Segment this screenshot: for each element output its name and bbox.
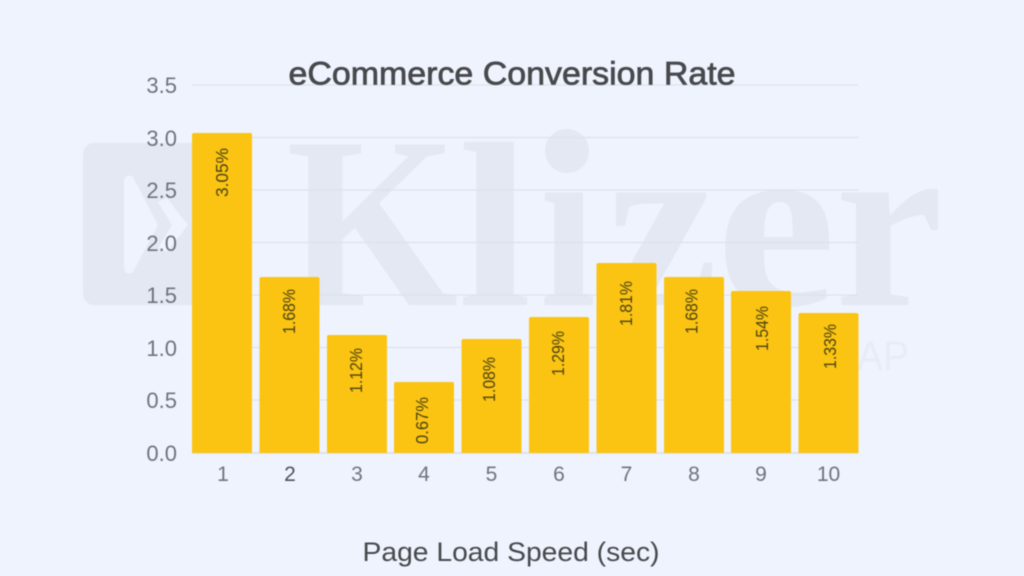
bar: 6 seconds, 1.29% [529, 317, 589, 453]
x axis labels: 3 [351, 463, 363, 486]
watermark wordmark: z [606, 87, 718, 358]
bar: 8 seconds, 1.68%: 1.68% [682, 289, 702, 334]
bar: 4 seconds, 0.67% [394, 382, 454, 453]
bar: 9 seconds, 1.54% [731, 291, 791, 453]
bar: 3 seconds, 1.12%: 1.12% [346, 348, 366, 393]
watermark i dot [545, 129, 589, 173]
bar: 1 second, 3.05%: 3.05% [212, 148, 232, 197]
x axis labels: 10 [817, 463, 840, 486]
watermark wordmark [286, 87, 943, 358]
x axis labels: 8 [688, 463, 700, 486]
y axis labels: 3.0 [146, 126, 177, 151]
title: eCommerce Conversion Rate [288, 56, 736, 92]
watermark icon [83, 143, 213, 305]
x axis labels: 6 [553, 463, 565, 486]
bar: 9 seconds, 1.54%: 1.54% [752, 306, 772, 351]
y axis labels: 1.0 [146, 336, 177, 361]
bar: 5 seconds, 1.08% [462, 339, 522, 453]
bar: 6 seconds, 1.29%: 1.29% [548, 331, 568, 376]
watermark wordmark: e [716, 87, 836, 358]
x axis labels: 1 [217, 463, 229, 486]
y axis labels: 0.5 [146, 388, 177, 413]
bar: 7 seconds, 1.81%: 1.81% [616, 281, 636, 326]
bar: 2 seconds, 1.68%: 1.68% [279, 289, 299, 334]
x axis labels [217, 463, 840, 486]
bar: 8 seconds, 1.68% [664, 277, 724, 453]
watermark: Klizer logo [83, 87, 943, 379]
x axis labels: 7 [621, 463, 632, 486]
y axis labels: 0.0 [146, 441, 177, 466]
watermark wordmark: l [458, 96, 532, 357]
bar: 1 second, 3.05% [192, 133, 252, 453]
watermark small text: AP [857, 332, 909, 379]
watermark wordmark: K [286, 87, 458, 358]
y axis labels: 2.5 [146, 178, 177, 203]
bar: 7 seconds, 1.81% [596, 263, 656, 453]
bar chart [192, 133, 858, 453]
x axis labels: 2 [284, 463, 296, 486]
bar: 4 seconds, 0.67%: 0.67% [412, 397, 432, 444]
bar: 10 seconds, 1.33% [798, 313, 858, 453]
watermark wordmark: i [540, 87, 596, 358]
x axis labels: 5 [486, 463, 497, 486]
watermark wordmark: r [835, 87, 943, 358]
y axis labels: 2.0 [146, 231, 177, 256]
bar: 3 seconds, 1.12% [327, 335, 387, 453]
bar: 10 seconds, 1.33%: 1.33% [820, 324, 840, 369]
y axis labels: 3.5 [146, 73, 177, 98]
grid lines [192, 85, 858, 453]
y axis labels [146, 73, 177, 466]
y axis labels: 1.5 [146, 283, 177, 308]
bar: 5 seconds, 1.08%: 1.08% [479, 357, 499, 402]
bar: 2 seconds, 1.68% [260, 277, 320, 453]
x axis title: Page Load Speed (sec) [362, 537, 660, 567]
x axis labels: 4 [418, 463, 430, 486]
x axis labels: 9 [755, 463, 767, 486]
